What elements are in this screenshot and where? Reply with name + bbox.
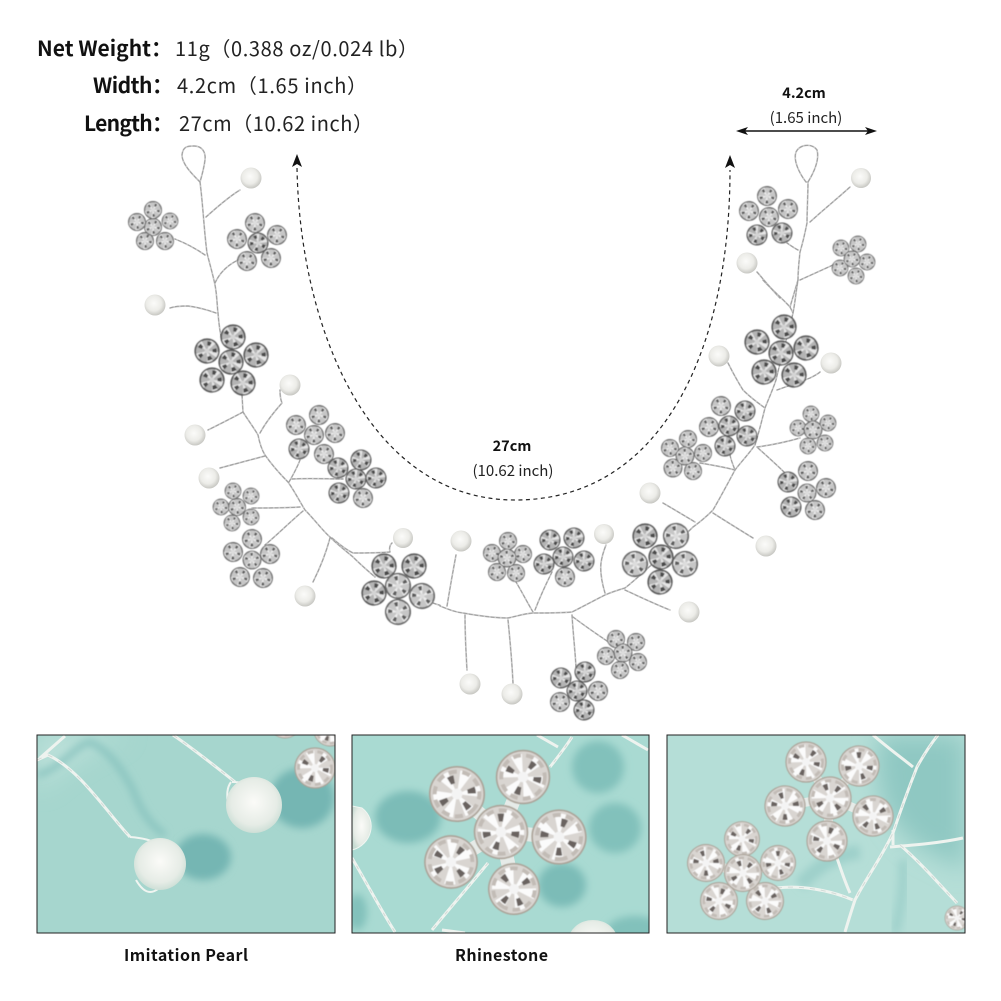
pearls [144, 168, 871, 704]
hair vine jewelry [129, 145, 875, 723]
width dimension arrow: 4.2cm [782, 82, 826, 103]
photo panel: imitation pearl [36, 734, 336, 934]
caption: imitation pearl: Imitation Pearl [124, 942, 248, 966]
specifications text: 4.2cm（1.65 inch） [177, 70, 367, 99]
rhinestone flowers [129, 185, 875, 723]
width dimension arrow: (1.65 inch) [770, 107, 842, 128]
caption: rhinestone: Rhinestone [455, 942, 548, 966]
specifications text: Length： [84, 108, 173, 138]
specifications text: 11g（0.388 oz/0.024 lb） [175, 33, 418, 62]
length dimension arrow: 27cm [493, 435, 531, 456]
specifications text: Width： [93, 70, 173, 100]
width dimension arrow [736, 82, 877, 135]
wires [170, 145, 850, 683]
length dimension arrow: (10.62 inch) [472, 460, 554, 481]
length dimension arrow [292, 154, 735, 500]
specifications text: 27cm（10.62 inch） [179, 108, 373, 137]
photo panel: flower detail [667, 735, 969, 933]
specifications text [37, 33, 418, 138]
photo panel: rhinestone [352, 734, 650, 934]
specifications text: Net Weight： [37, 33, 172, 63]
